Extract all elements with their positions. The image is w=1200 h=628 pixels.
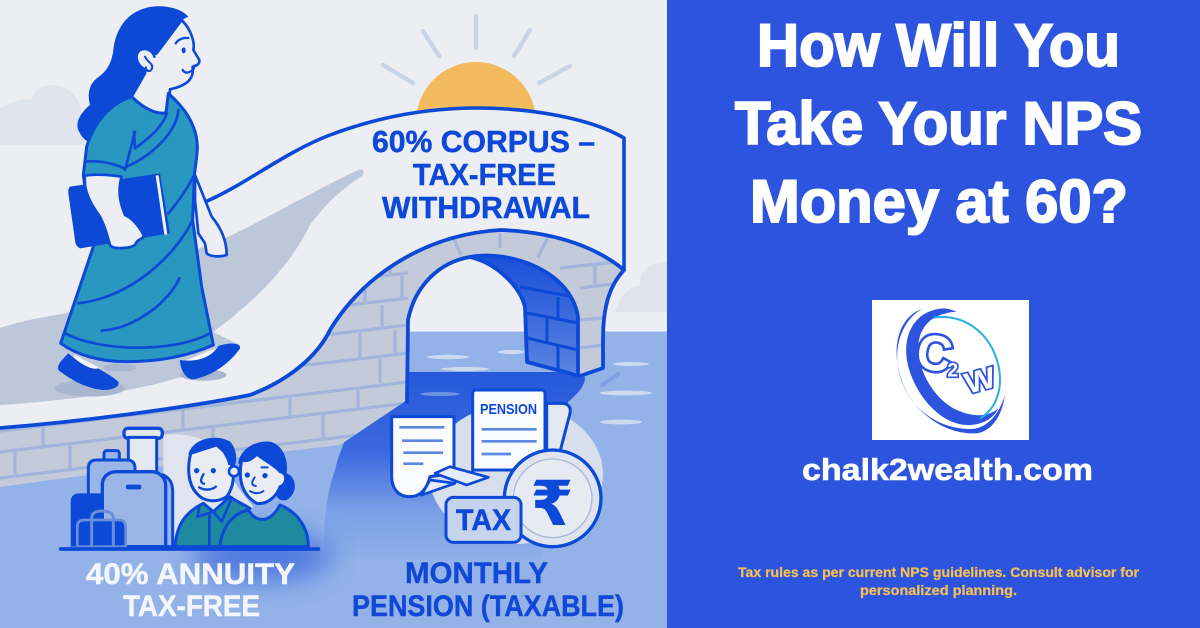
disclaimer <box>738 565 1140 598</box>
pension backdrop circle <box>429 404 603 544</box>
suitcases <box>124 428 162 438</box>
logo swooshes <box>897 309 1005 433</box>
icon: sun rays <box>383 16 570 83</box>
bridge shadow on water <box>324 372 585 560</box>
banner text: 60% corpus: 60% CORPUS – <box>372 124 595 159</box>
rupee symbol: ₹ <box>530 467 574 540</box>
bridge inner arch <box>478 257 576 372</box>
ear <box>137 49 154 70</box>
horizon highlight <box>407 330 667 332</box>
banner text: 60% corpus <box>372 124 595 225</box>
label: monthly pension taxable: PENSION (TAXABLE) <box>352 590 624 623</box>
stone bridge <box>0 230 624 487</box>
logo: C2W <box>872 300 1029 440</box>
banner background <box>205 108 624 270</box>
pension document <box>473 390 545 477</box>
logo letters: 2 <box>947 361 958 382</box>
bridge and banner outlines <box>0 108 624 428</box>
sari dress <box>61 93 213 362</box>
disclaimer: Tax rules as per current NPS guidelines. Consult advisor for <box>738 565 1140 580</box>
title <box>735 12 1142 235</box>
icon: right cloud <box>615 262 667 312</box>
receipt <box>392 417 454 497</box>
woman walking with book <box>55 6 240 397</box>
luggage and couple <box>61 428 318 549</box>
ground shadow path <box>0 170 364 405</box>
logo letters <box>913 323 999 401</box>
river and lower ground <box>0 331 667 628</box>
panel: title and branding <box>667 0 1200 628</box>
icon: left cloud <box>0 85 85 145</box>
annuity shadow glow <box>192 530 332 582</box>
label: monthly pension taxable <box>352 557 624 623</box>
title: Take Your NPS <box>735 90 1142 157</box>
panel: illustration <box>0 0 667 628</box>
socks and shoes <box>72 348 215 370</box>
icon: sun <box>416 62 536 182</box>
hair <box>77 6 188 142</box>
pension documents, coin and tax tag <box>392 390 601 547</box>
woman in couple <box>220 505 308 547</box>
label: 40% annuity tax-free: 40% ANNUITY <box>86 558 295 591</box>
disclaimer: personalized planning. <box>860 583 1017 598</box>
face and neck <box>132 20 199 114</box>
logo letters: C <box>913 323 956 383</box>
water ripples <box>420 350 652 424</box>
back document <box>547 403 570 452</box>
logo letters: W <box>961 361 999 401</box>
tax tag box <box>446 497 521 542</box>
shelf line <box>61 543 318 554</box>
label: monthly pension taxable: MONTHLY <box>405 557 548 590</box>
facial features <box>176 38 194 73</box>
website: chalk2wealth.com <box>802 452 1093 487</box>
label: 40% annuity tax-free <box>86 558 295 623</box>
label: 40% annuity tax-free: TAX-FREE <box>123 590 260 623</box>
banner text: 60% corpus: TAX-FREE <box>413 157 556 192</box>
tax tag label: TAX <box>456 504 511 537</box>
near arm and hand <box>85 175 144 248</box>
man <box>175 497 250 547</box>
book <box>68 173 170 248</box>
pension document heading: PENSION <box>480 401 537 418</box>
title: Money at 60? <box>750 168 1128 235</box>
far arm and hand <box>195 175 227 256</box>
banner text: 60% corpus: WITHDRAWAL <box>382 190 590 225</box>
pale backdrop <box>163 434 253 547</box>
coin <box>504 450 601 547</box>
title: How Will You <box>757 12 1120 79</box>
